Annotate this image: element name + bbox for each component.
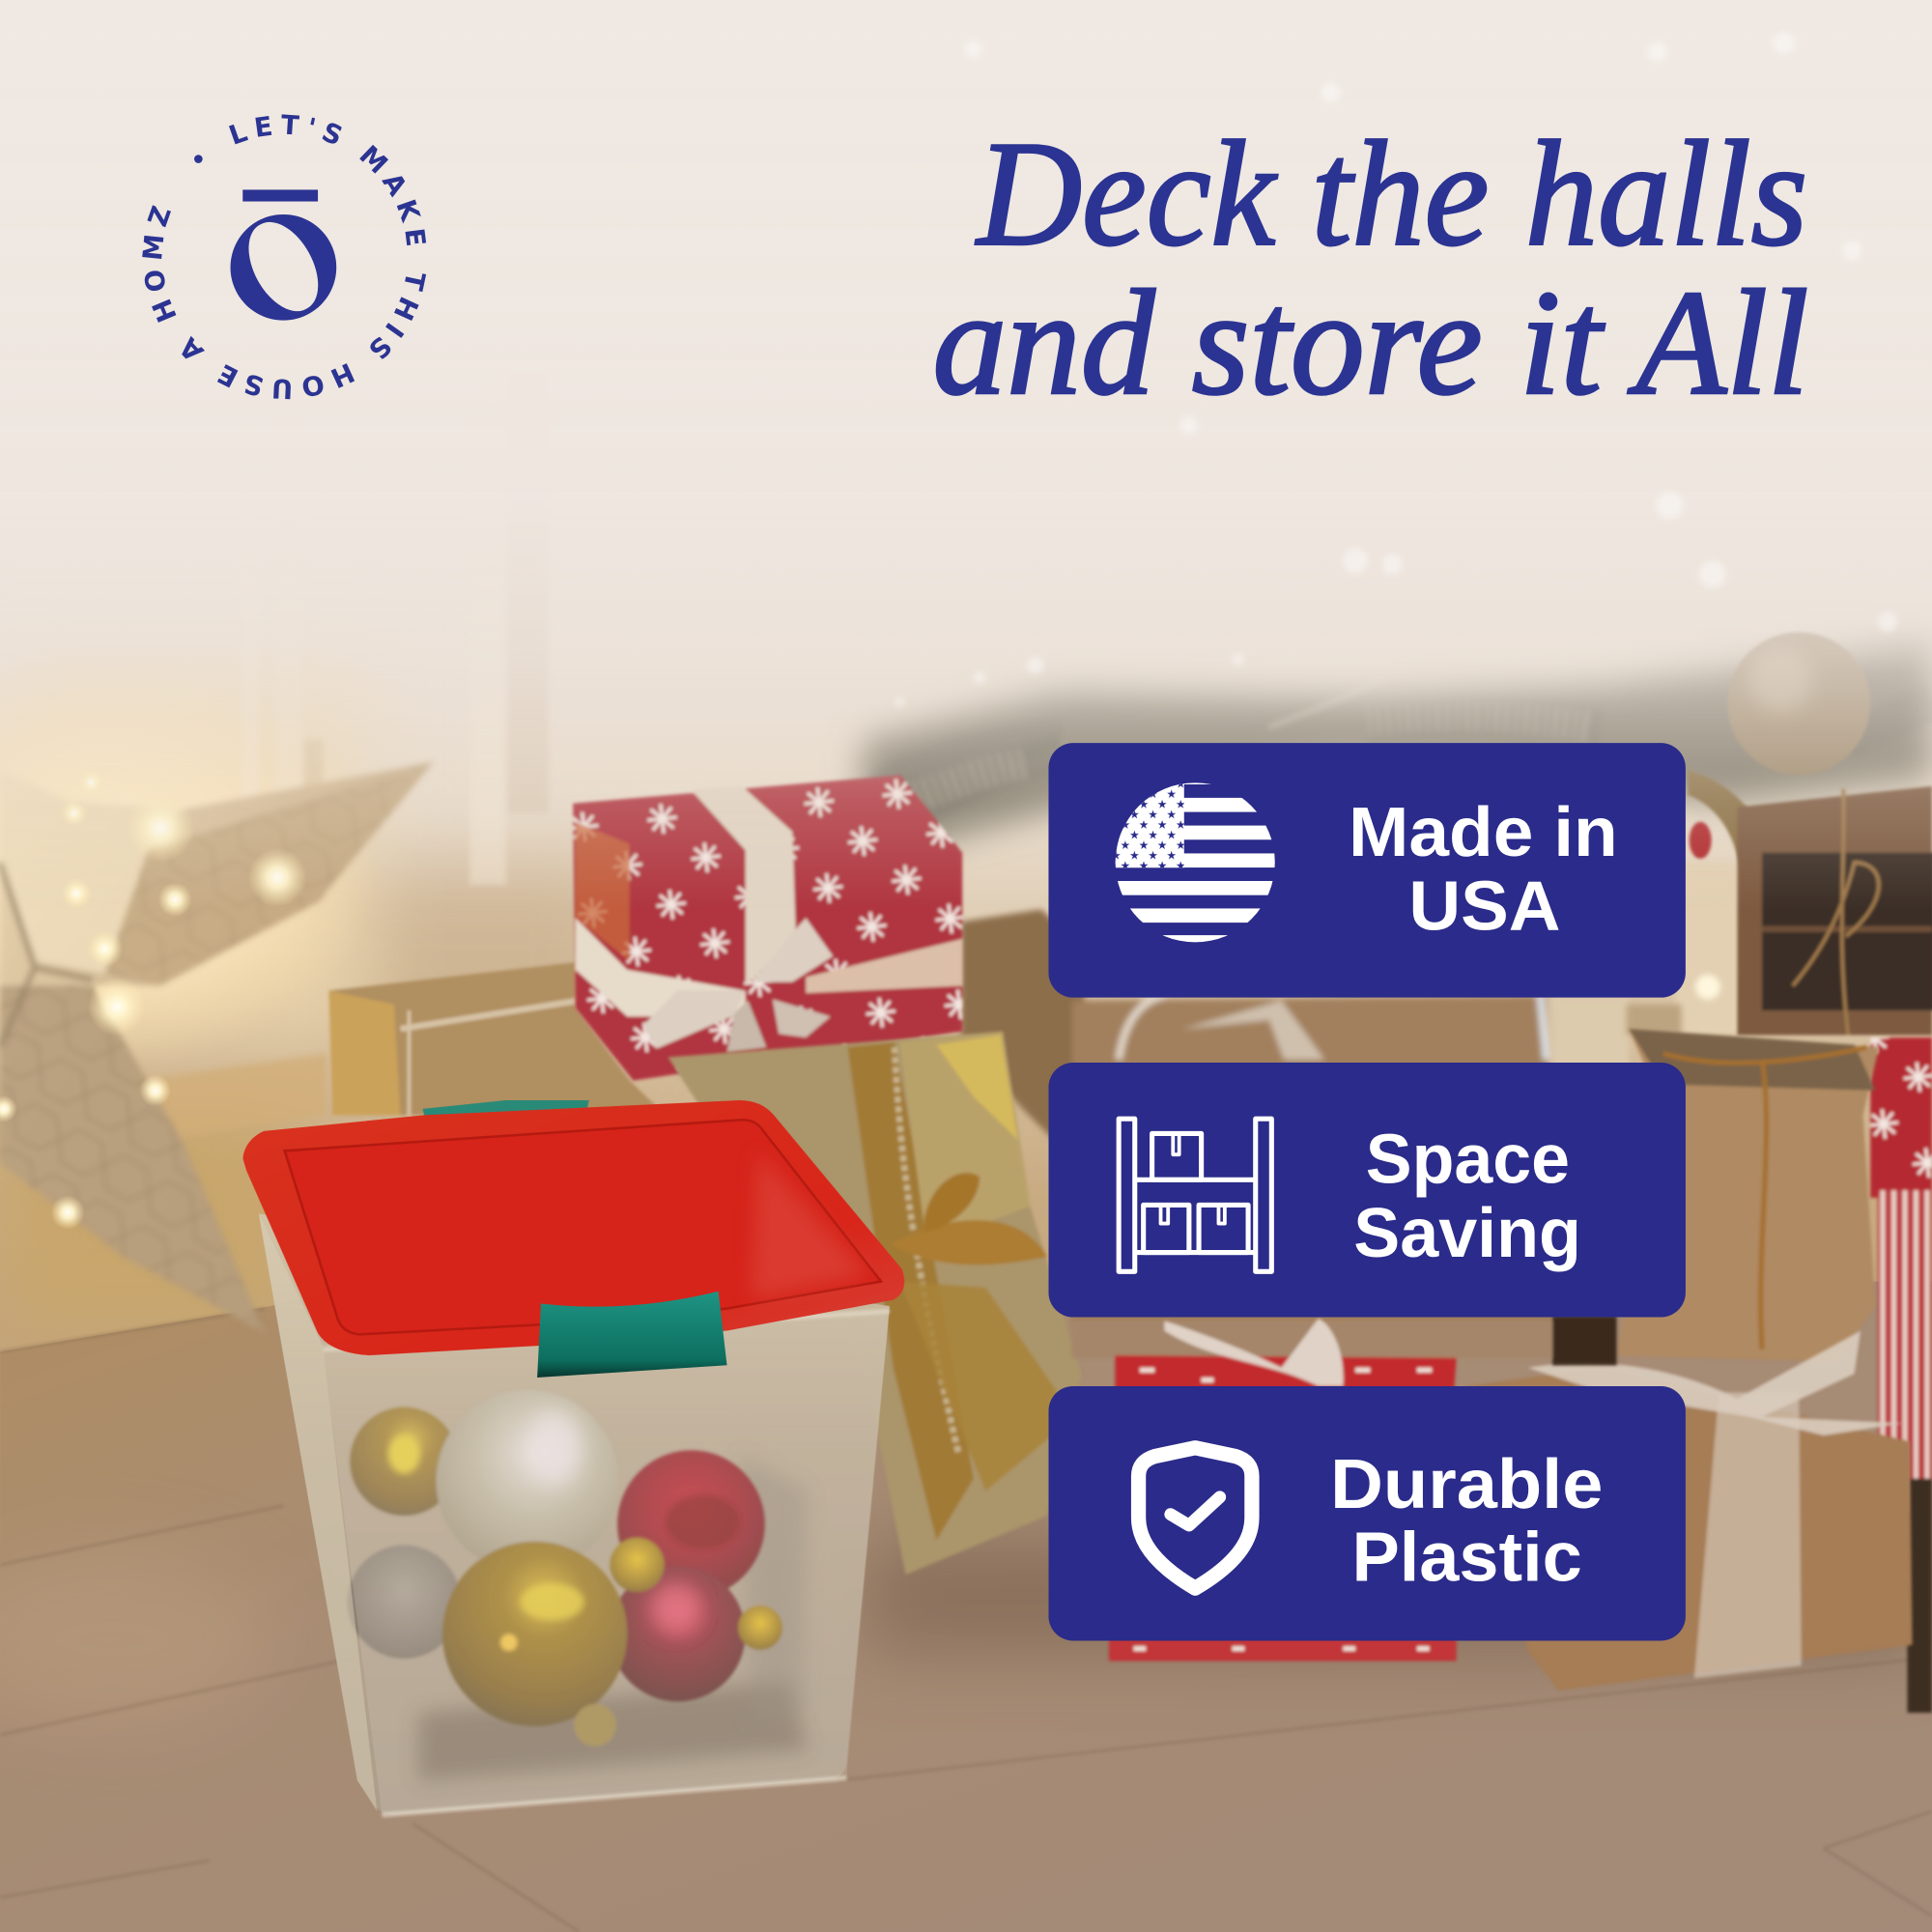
gift: brown box behind red gift (961, 909, 1084, 1171)
gift: red with stars (573, 775, 962, 1081)
gift: cream vase behind panel (1627, 863, 1740, 1035)
logo ring text: LET'S MAKE THIS HOUSE A HOMZ (142, 114, 427, 400)
tree branches (863, 632, 1932, 894)
bokeh lights (895, 32, 1897, 707)
logo mark (231, 214, 336, 321)
gift: kraft box with white ribbon (1466, 1331, 1913, 1690)
label: USA (1408, 867, 1561, 945)
gift: kraft box with twine (1616, 1029, 1879, 1361)
panel: Space Saving (1048, 1063, 1686, 1318)
gift: far right red and stripes (1870, 1037, 1932, 1713)
icon: shelf with boxes (1119, 1119, 1271, 1271)
wall moldings (156, 370, 549, 1140)
latch (537, 1292, 727, 1378)
logo macron bar (242, 189, 318, 202)
headline (933, 110, 1808, 426)
label: Plastic (1351, 1518, 1582, 1596)
icon: shield with check (1139, 1448, 1252, 1588)
ornament ball on tree (1727, 632, 1870, 775)
label: Durable (1330, 1445, 1603, 1523)
label: Saving (1353, 1194, 1581, 1272)
gift: cardboard box (329, 962, 666, 1115)
gift: red snow gift (1072, 1316, 1616, 1661)
gift: center box and ribbons (1072, 996, 1629, 1324)
storage bin with ornaments (242, 1100, 904, 1815)
shadow below gifts (863, 1540, 1922, 1651)
headline line 1: Deck the halls (976, 110, 1807, 277)
fog overlay (0, 0, 1932, 912)
bin body (259, 1213, 890, 1815)
logo dot (194, 155, 203, 163)
star lantern (0, 761, 434, 1333)
gift: gold wrapped (668, 1032, 1082, 1575)
fairy lights (0, 769, 307, 1230)
headline line 2: and store it All (933, 259, 1808, 426)
wall warm glow (0, 640, 616, 1331)
logo badge (142, 114, 427, 400)
label (1349, 793, 1618, 945)
panel: Made in USA (1048, 743, 1686, 998)
label (1353, 1120, 1581, 1272)
icon: US flag (1109, 782, 1282, 945)
label: Space (1366, 1120, 1570, 1198)
floor (0, 1282, 1932, 1932)
label (1330, 1445, 1603, 1596)
red lid (242, 1100, 904, 1355)
panel: Durable Plastic (1048, 1386, 1686, 1640)
gift: wood frame box (1737, 786, 1932, 1035)
ornaments (348, 1390, 807, 1780)
lid top handle (423, 1100, 589, 1119)
bin front veil (323, 1311, 890, 1815)
label: Made in (1349, 793, 1618, 871)
